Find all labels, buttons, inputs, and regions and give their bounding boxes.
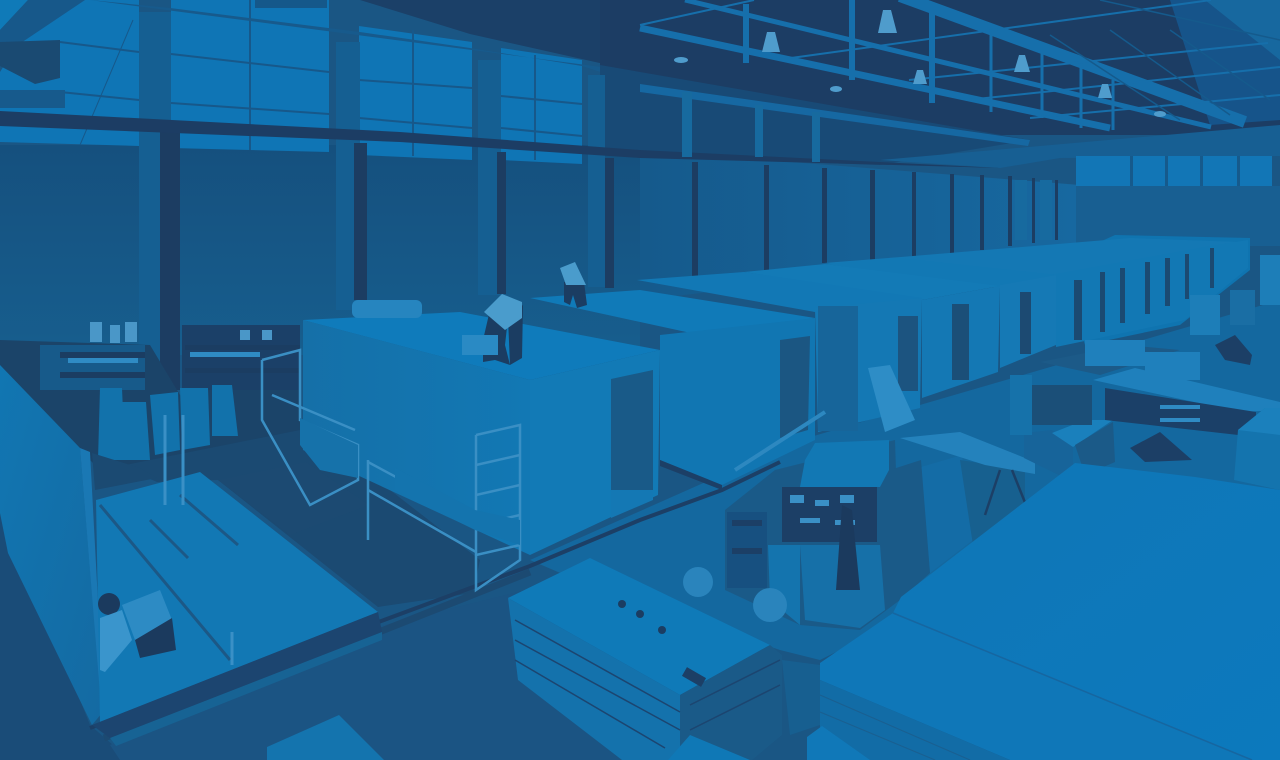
structural columns	[139, 12, 614, 390]
scaffold	[262, 350, 520, 590]
crane beam across windows	[0, 111, 1000, 168]
far row of modules	[824, 235, 1250, 347]
module 4	[744, 264, 1000, 398]
back wall left	[0, 145, 1280, 355]
wall panel left	[0, 365, 104, 725]
workers on roof	[483, 262, 587, 365]
right wall pilasters	[682, 92, 1058, 277]
storage shelves at left	[0, 322, 300, 470]
scaffold platforms	[300, 418, 520, 545]
items on roof	[352, 300, 498, 355]
panel pieces bottom left	[267, 715, 384, 760]
upper left ceiling	[0, 0, 640, 108]
stacked panels bottom centre	[508, 558, 820, 760]
windows left	[0, 0, 582, 164]
insulation rolls	[98, 385, 238, 460]
ceiling structure right	[600, 0, 1280, 186]
ceiling lamps	[674, 10, 1166, 117]
sawhorse and floor behind	[900, 432, 1035, 545]
pipe and hoses	[735, 412, 825, 470]
module 1 main	[303, 312, 660, 555]
worker kneeling	[98, 590, 176, 672]
benches at right	[1010, 255, 1280, 490]
central machinery cluster	[683, 365, 973, 630]
rail track	[90, 462, 780, 738]
floor deck left	[92, 415, 382, 746]
module 3	[637, 272, 922, 432]
module 2	[530, 290, 815, 490]
module 5	[825, 258, 1058, 368]
window mullions	[60, 0, 582, 160]
large stacked panels bottom right	[807, 463, 1280, 760]
